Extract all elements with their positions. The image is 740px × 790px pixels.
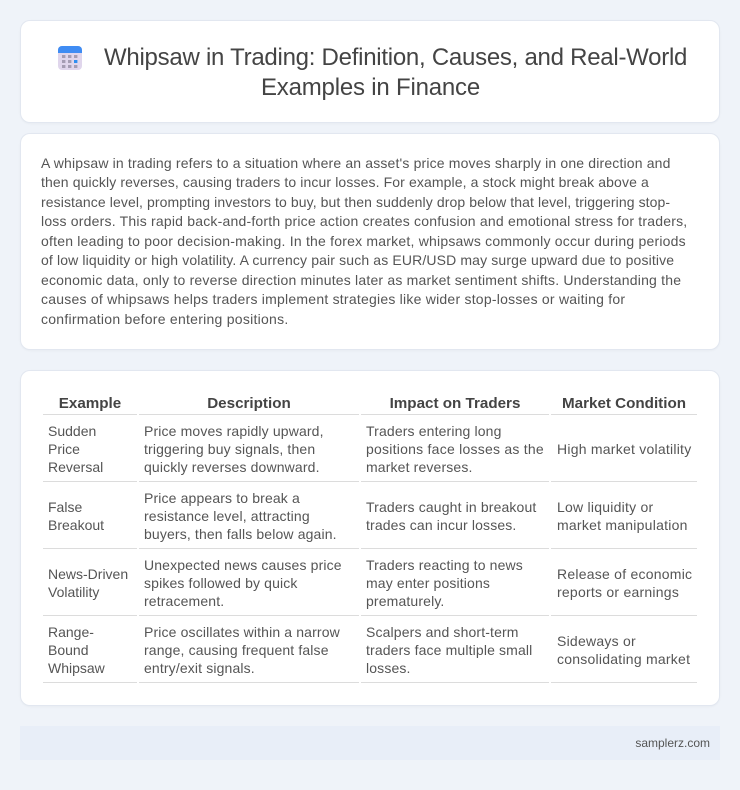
- table row: sudden price reversal: market reverses.: [366, 459, 472, 475]
- table row: news-driven volatility: spikes followed by quick: [144, 575, 298, 591]
- table row: false breakout: Low liquidity or: [557, 499, 653, 515]
- title: Examples in Finance: [261, 74, 480, 101]
- table row: false breakout: Traders caught in breakout: [366, 499, 536, 515]
- title: [104, 44, 687, 101]
- panel: title card: [20, 20, 720, 123]
- table row: sudden price reversal: Price moves rapidly upward,: [144, 423, 324, 439]
- table row: range-bound whipsaw: Sideways or: [557, 633, 636, 649]
- table row: news-driven volatility: Unexpected news causes price: [144, 557, 342, 573]
- table row: news-driven volatility: Traders reacting to news: [366, 557, 523, 573]
- text block: whipsaw explanation: A whipsaw in trading refers to a situation where an asset's price moves sharply in one direction and: [41, 155, 671, 171]
- table row: sudden price reversal: [48, 423, 692, 475]
- table row: sudden price reversal: quickly reverses downward.: [144, 459, 320, 475]
- text block: whipsaw explanation: causes of whipsaws helps traders implement strategies like wider stop-losses or waiting for: [41, 291, 625, 307]
- text block: whipsaw explanation: [41, 155, 687, 327]
- table header: [59, 395, 686, 412]
- text block: whipsaw explanation: of low liquidity or high volatility. A currency pair such as EUR/USD may surge upward due to positive: [41, 252, 674, 268]
- panel: intro paragraph card: [20, 133, 720, 350]
- table row: range-bound whipsaw: losses.: [366, 660, 411, 676]
- table row: range-bound whipsaw: Bound: [48, 642, 88, 658]
- table row: false breakout: market manipulation: [557, 517, 688, 533]
- table header: Description: [207, 395, 291, 412]
- text block: whipsaw explanation: then quickly reverses, causing traders to incur losses. For example, a stock might break above a: [41, 174, 649, 190]
- table header: Impact on Traders: [390, 395, 520, 412]
- icon: calendar: [58, 46, 82, 70]
- table row: range-bound whipsaw: entry/exit signals.: [144, 660, 255, 676]
- title: Whipsaw in Trading: Definition, Causes, and Real-World: [104, 44, 687, 71]
- table row: false breakout: buyers, then falls below again.: [144, 526, 337, 542]
- table row: sudden price reversal: positions face losses as the: [366, 441, 544, 457]
- table row: news-driven volatility: Release of economic: [557, 566, 692, 582]
- table row: sudden price reversal: Sudden: [48, 423, 96, 439]
- panel: examples table card: [20, 370, 720, 706]
- table row: news-driven volatility: may enter positions: [366, 575, 490, 591]
- text block: whipsaw explanation: resistance level, prompting investors to buy, but then suddenly drop below that level, triggering stop-: [41, 194, 670, 210]
- table row: range-bound whipsaw: [48, 624, 690, 676]
- table row: news-driven volatility: [48, 557, 692, 609]
- text block: whipsaw explanation: often leading to poor decision-making. In the forex market, whipsaws commonly occur during periods: [41, 233, 686, 249]
- table row: range-bound whipsaw: Price oscillates within a narrow: [144, 624, 340, 640]
- text block: whipsaw explanation: loss orders. This rapid back-and-forth price action creates confusion and emotional stress for traders,: [41, 213, 687, 229]
- table row: news-driven volatility: retracement.: [144, 593, 224, 609]
- table row: false breakout: Price appears to break a: [144, 490, 300, 506]
- table row: sudden price reversal: Traders entering long: [366, 423, 502, 439]
- table row: range-bound whipsaw: Scalpers and short-term: [366, 624, 519, 640]
- table row: false breakout: False: [48, 499, 82, 515]
- table row: false breakout: resistance level, attracting: [144, 508, 310, 524]
- table row: range-bound whipsaw: Range-: [48, 624, 94, 640]
- table row: range-bound whipsaw: range, causing frequent false: [144, 642, 329, 658]
- table row: sudden price reversal: High market volatility: [557, 441, 691, 457]
- table row: news-driven volatility: Volatility: [48, 584, 99, 600]
- table row: sudden price reversal: triggering buy signals, then: [144, 441, 315, 457]
- table row: false breakout: [48, 490, 688, 542]
- table row: range-bound whipsaw: Whipsaw: [48, 660, 105, 676]
- table row: news-driven volatility: reports or earnings: [557, 584, 679, 600]
- footer bar: [20, 726, 720, 760]
- table header: Market Condition: [562, 395, 686, 412]
- table row: news-driven volatility: prematurely.: [366, 593, 444, 609]
- table row: news-driven volatility: News-Driven: [48, 566, 128, 582]
- table row: sudden price reversal: Reversal: [48, 459, 103, 475]
- footer source text: samplerz.com: [635, 736, 710, 750]
- table row: range-bound whipsaw: traders face multiple small: [366, 642, 532, 658]
- text block: whipsaw explanation: confirmation before entering positions.: [41, 311, 288, 327]
- text block: whipsaw explanation: economic data, only to reverse direction minutes later as market sentiment shifts. Understanding the: [41, 272, 681, 288]
- table header: Example: [59, 395, 121, 412]
- table row: false breakout: Breakout: [48, 517, 104, 533]
- table row: false breakout: trades can incur losses.: [366, 517, 516, 533]
- table row: sudden price reversal: Price: [48, 441, 80, 457]
- table row: range-bound whipsaw: consolidating market: [557, 651, 690, 667]
